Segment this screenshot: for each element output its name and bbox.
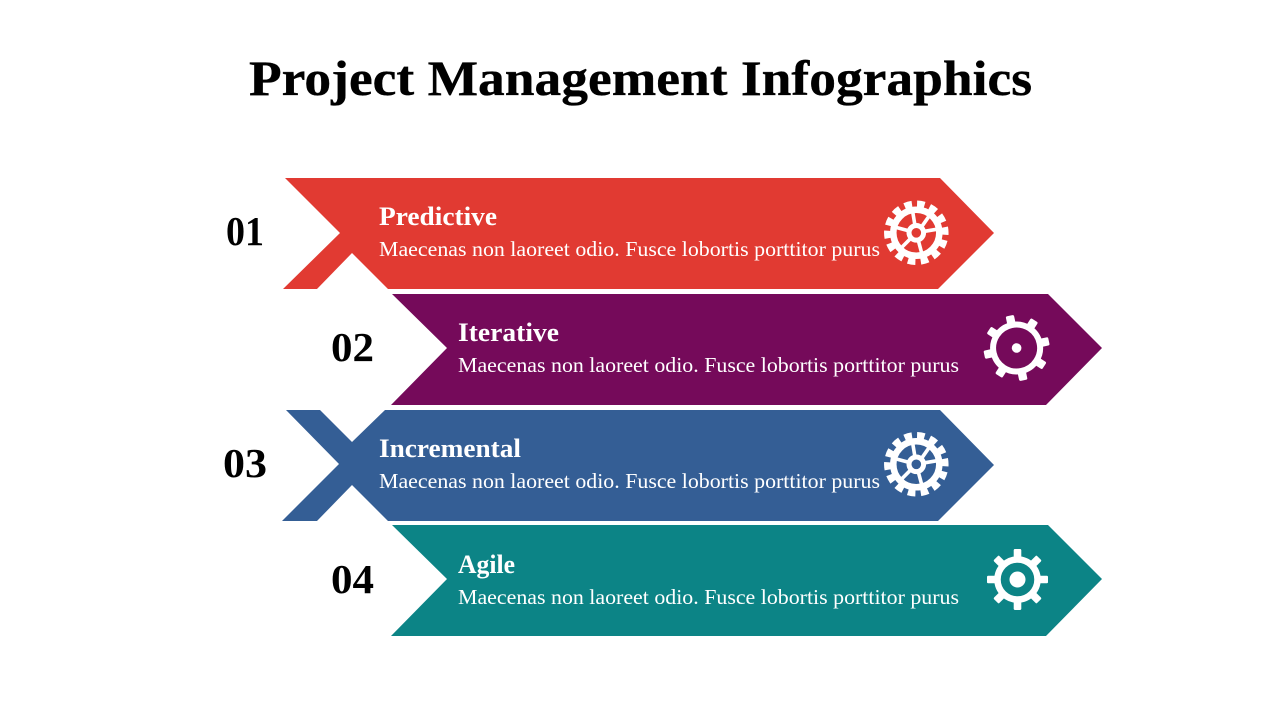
arrow: teal [391,525,1102,636]
heading: Incremental: Incremental [379,434,521,463]
number 01: 01 [226,208,264,254]
arrow: purple [391,294,1102,405]
number 03: 03 [223,440,267,486]
heading: Iterative: Iterative [458,318,559,347]
text: Iterative description: Maecenas non laoreet odio. Fusce lobortis porttitor purus [458,353,959,377]
text: Predictive description: Maecenas non laoreet odio. Fusce lobortis porttitor purus [379,237,880,261]
text: Agile description: Maecenas non laoreet odio. Fusce lobortis porttitor purus [458,585,959,609]
panel: 03 Incremental [223,410,994,521]
icon: gear dense [887,204,946,262]
title: Project Management Infographics [249,50,1032,106]
panel: 02 Iterative [331,294,1102,405]
number 04: 04 [331,556,374,602]
arrow: red [283,178,994,289]
text: Incremental description: Maecenas non laoreet odio. Fusce lobortis porttitor purus [379,469,880,493]
heading: Predictive: Predictive [379,202,497,231]
heading: Agile: Agile [458,550,515,579]
number 02: 02 [331,324,374,370]
panel: 01 Predictive [226,178,994,289]
icon: gear with large hub [987,549,1048,610]
arrow: blue [282,410,994,521]
panel: 04 Agile [331,525,1102,636]
icon: gear dense [887,435,946,494]
icon: gear eight teeth [977,309,1056,387]
